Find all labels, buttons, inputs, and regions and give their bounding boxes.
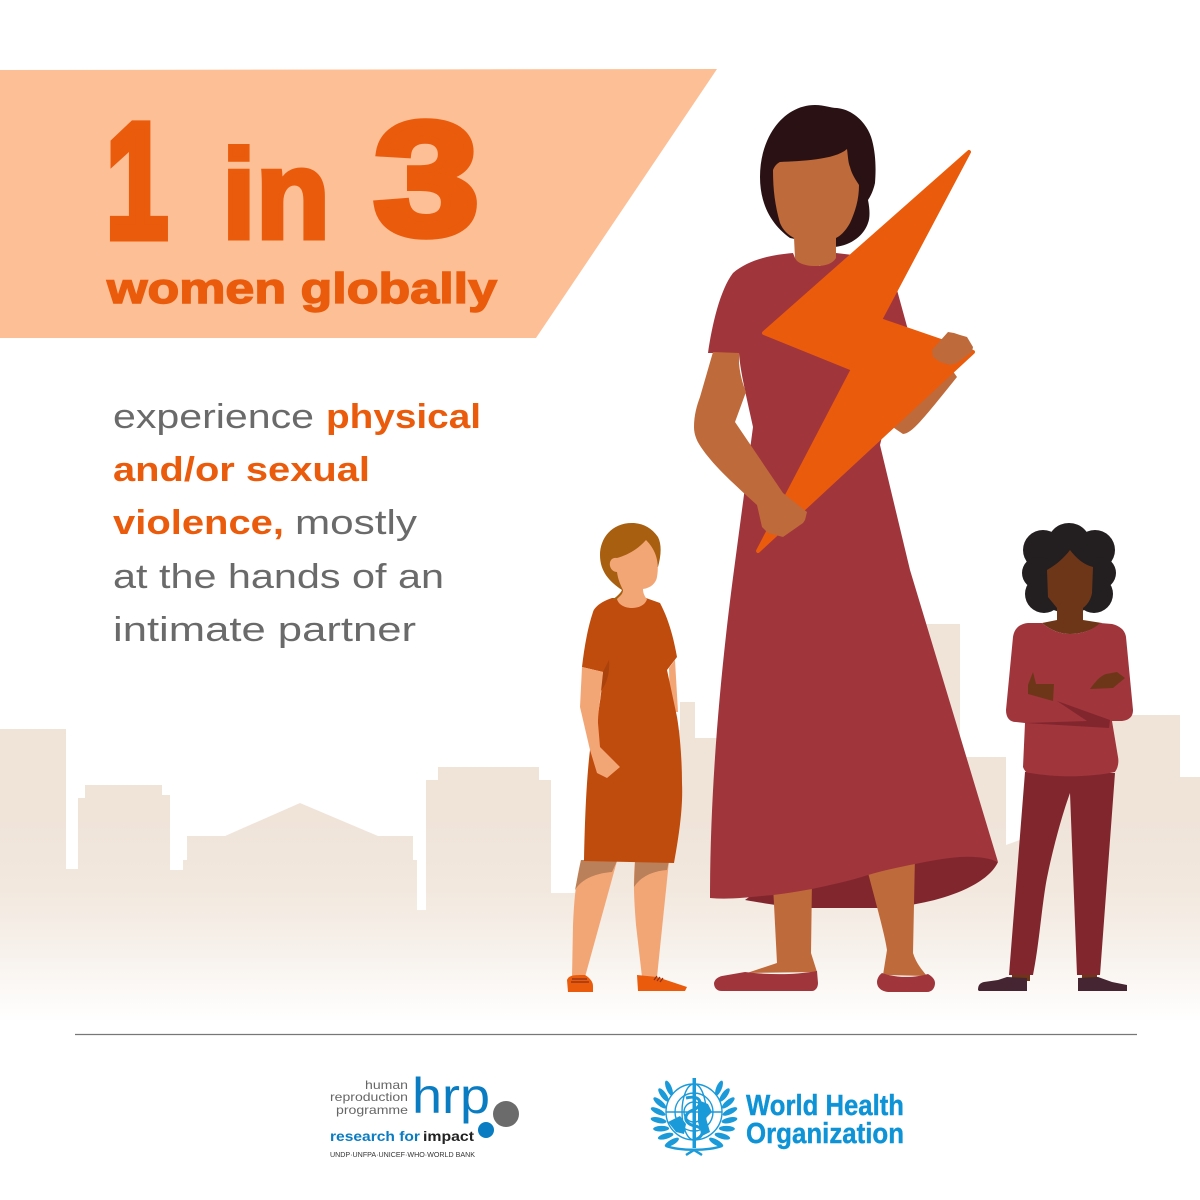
ankles bbox=[1012, 972, 1097, 981]
subheading: women globally: women globally bbox=[106, 265, 497, 313]
logo: World Health Organization bbox=[650, 1078, 904, 1155]
logo: World Health Organization: Organization bbox=[746, 1118, 904, 1150]
headline: 1 in 3 bbox=[106, 89, 479, 272]
icon: WHO emblem bbox=[650, 1078, 738, 1155]
logo: HRP research for impact bbox=[330, 1068, 519, 1159]
logo: HRP research for impact: impact bbox=[423, 1128, 474, 1144]
figure: central woman holding lightning bolt bbox=[694, 105, 998, 992]
hair bbox=[760, 105, 876, 247]
face and neck bbox=[610, 540, 658, 608]
hands bbox=[1028, 672, 1054, 701]
logo: HRP research for impact: human bbox=[365, 1078, 408, 1092]
logo: HRP research for impact: reproduction bbox=[330, 1090, 408, 1104]
logo: HRP research for impact: hrp bbox=[412, 1068, 490, 1124]
icon: lightning bolt bbox=[758, 152, 973, 551]
body text: mostly bbox=[295, 504, 417, 542]
body text: and/or sexual bbox=[113, 451, 370, 489]
logo: World Health Organization: World Health bbox=[746, 1090, 904, 1122]
headline: 1 in 3: 1 bbox=[106, 89, 168, 272]
body text: at the hands of an bbox=[113, 558, 444, 596]
sweater fold bbox=[1025, 701, 1110, 728]
body text: intimate partner bbox=[113, 611, 416, 649]
figure: girl in orange dress bbox=[567, 523, 687, 992]
legs bbox=[572, 860, 617, 977]
trousers bbox=[1009, 772, 1115, 975]
far arm bbox=[669, 660, 678, 712]
hair bbox=[1022, 523, 1116, 613]
dress lining bbox=[745, 845, 998, 908]
shoes bbox=[714, 971, 818, 991]
sweater bbox=[1006, 623, 1133, 776]
dress bbox=[582, 598, 682, 863]
near arm bbox=[580, 667, 620, 778]
logo: HRP research for impact: UNDP·UNFPA·UNICEF·WHO·WORLD BANK bbox=[330, 1150, 475, 1159]
city skyline background bbox=[0, 624, 1200, 1022]
hand on bolt bbox=[932, 332, 973, 365]
body text: physical bbox=[326, 398, 481, 436]
body text: experience bbox=[113, 398, 314, 436]
legs bbox=[747, 880, 817, 973]
face and neck bbox=[1042, 550, 1102, 634]
near arm and hand bbox=[694, 352, 807, 537]
body text: violence, bbox=[113, 504, 284, 542]
face and neck bbox=[773, 149, 859, 266]
far arm behind bolt bbox=[890, 360, 957, 434]
dress bbox=[708, 253, 998, 899]
figure: woman with crossed arms bbox=[978, 523, 1133, 991]
wreath bbox=[650, 1080, 738, 1149]
body text bbox=[113, 398, 481, 649]
banner: 1 in 3 women globally bbox=[0, 69, 717, 338]
headline: 1 in 3: in bbox=[222, 124, 330, 265]
logo: HRP research for impact: programme bbox=[336, 1103, 408, 1117]
shoes bbox=[567, 975, 593, 992]
shoes bbox=[978, 977, 1027, 991]
headline: 1 in 3: 3 bbox=[374, 89, 479, 268]
hair bbox=[600, 523, 661, 600]
logo: HRP research for impact: research for bbox=[330, 1128, 421, 1144]
